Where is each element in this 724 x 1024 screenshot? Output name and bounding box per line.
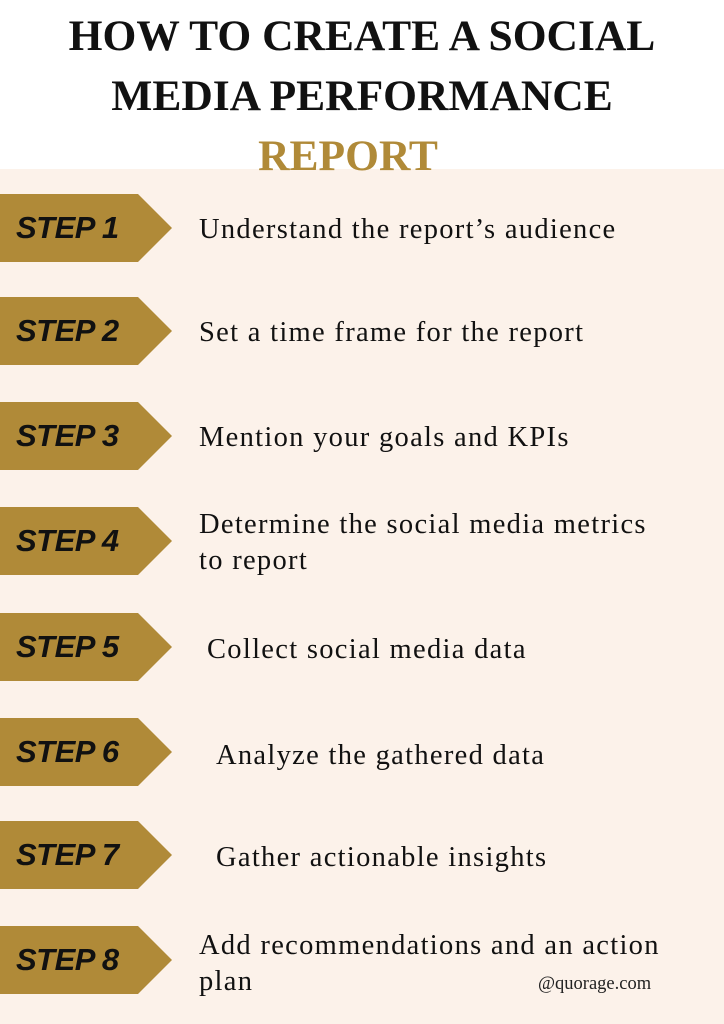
title bbox=[69, 12, 655, 180]
step 2: STEP 2 bbox=[16, 313, 119, 348]
step 1: Understand the report’s audience bbox=[199, 214, 616, 245]
step 5 bbox=[0, 613, 527, 681]
step 4: Determine the social media metrics bbox=[199, 509, 647, 540]
step 4: to report bbox=[199, 545, 308, 576]
step 8: Add recommendations and an action bbox=[199, 930, 660, 961]
step 8: plan bbox=[199, 966, 253, 997]
step 3 bbox=[0, 402, 570, 470]
step 7 bbox=[0, 821, 547, 889]
step 4: STEP 4 bbox=[16, 523, 119, 558]
title: REPORT bbox=[258, 132, 438, 180]
step 1: STEP 1 bbox=[16, 210, 119, 245]
step 6: Analyze the gathered data bbox=[216, 740, 545, 771]
step 2 bbox=[0, 297, 584, 365]
title: HOW TO CREATE A SOCIAL bbox=[69, 12, 655, 60]
step 6 bbox=[0, 718, 545, 786]
watermark: @quorage.com bbox=[538, 974, 651, 994]
step 3: Mention your goals and KPIs bbox=[199, 422, 570, 453]
step 1 bbox=[0, 194, 616, 262]
step 2: Set a time frame for the report bbox=[199, 317, 584, 348]
step 6: STEP 6 bbox=[16, 734, 119, 769]
step 8: STEP 8 bbox=[16, 942, 119, 977]
step 3: STEP 3 bbox=[16, 418, 119, 453]
step 5: Collect social media data bbox=[207, 634, 527, 665]
step 7: Gather actionable insights bbox=[216, 842, 547, 873]
step 5: STEP 5 bbox=[16, 629, 119, 664]
step 4 bbox=[0, 507, 647, 576]
title: MEDIA PERFORMANCE bbox=[111, 72, 613, 120]
step 7: STEP 7 bbox=[16, 837, 119, 872]
step 8 bbox=[0, 926, 660, 997]
